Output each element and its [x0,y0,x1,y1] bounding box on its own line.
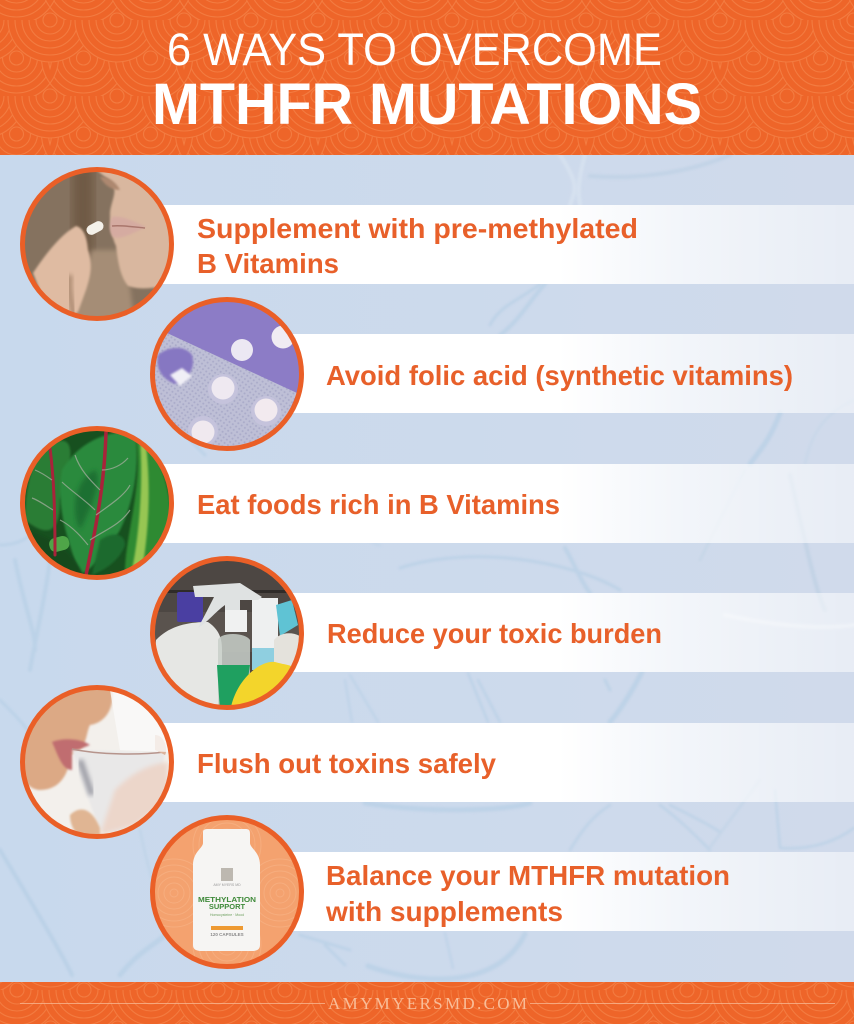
white bar 3 [150,464,854,543]
text: step 5: Flush out toxins safely [197,748,497,779]
text: step 1: B Vitamins [197,248,339,279]
photo: cleaning products [150,558,305,713]
photo: Methylation Support supplement bottle: AMY MYERS MD [213,883,241,887]
text: step 6: Balance your MTHFR mutation [326,860,730,891]
photo: green chard leaf [20,428,175,583]
footer band [0,982,854,1024]
title line 2: MTHFR MUTATIONS [152,72,702,137]
text: step 1: Supplement with pre-methylated [197,213,638,244]
header band [0,0,854,155]
photo: person drinking water [20,686,175,841]
photo: Methylation Support supplement bottle: 120 CAPSULES [210,932,244,937]
white bar 2 [280,334,854,413]
white bar 1 [150,205,854,284]
white bar 6 [280,852,854,931]
text: step 4: Reduce your toxic burden [327,618,662,649]
photo: blister pack of pills [150,298,305,455]
photo: Methylation Support supplement bottle: METHYLATION [198,895,256,904]
text: step 6: with supplements [325,896,563,927]
photo: woman taking pill [20,165,175,325]
photo: Methylation Support supplement bottle [150,815,304,969]
photo: Methylation Support supplement bottle: SUPPORT [209,902,246,911]
footer website text: AMYMYERSMD.COM [328,994,527,1013]
text: step 2: Avoid folic acid (synthetic vitamins) [326,360,793,391]
white bar 4 [280,593,854,672]
title line 1: 6 WAYS TO OVERCOME [167,24,662,75]
photo: Methylation Support supplement bottle: Homocysteine · Mood [210,913,244,917]
white bar 5 [150,723,854,802]
text: step 3: Eat foods rich in B Vitamins [197,489,560,520]
